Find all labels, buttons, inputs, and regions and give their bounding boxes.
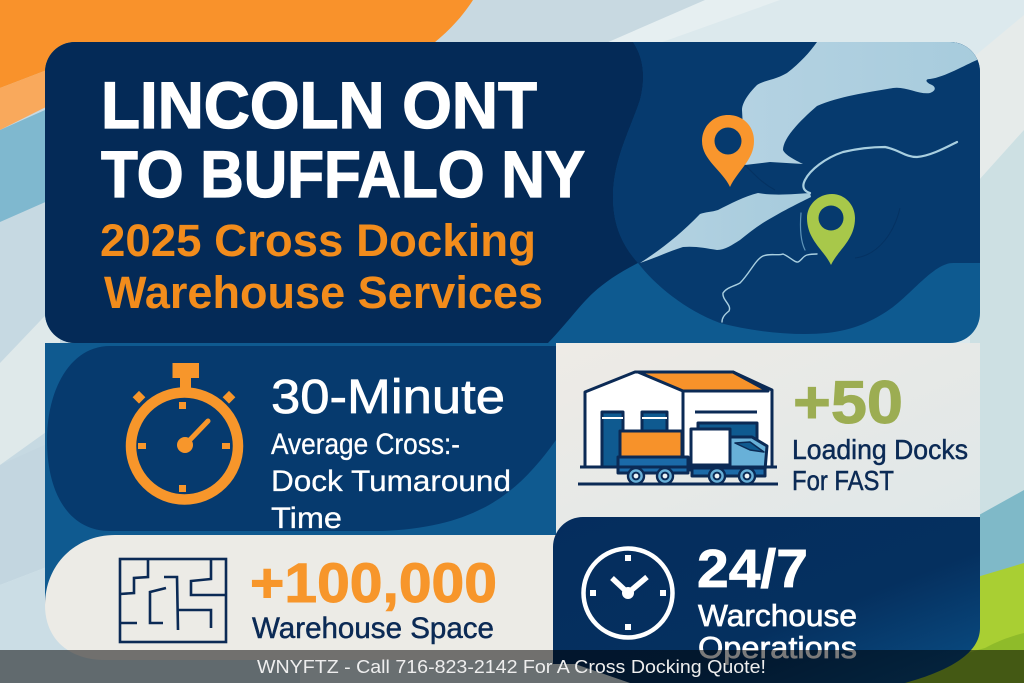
stat text: +100,000 — [250, 551, 497, 645]
stat text: +100,000: +100,000 — [250, 551, 497, 614]
icon: green map pin — [807, 194, 855, 265]
icon: warehouse and truck — [578, 372, 778, 484]
map lakes — [640, 40, 995, 263]
stat text: +50: Loading Docks — [792, 434, 968, 465]
map rivers — [722, 142, 957, 322]
title: LINCOLN ONT — [101, 68, 537, 142]
stat text: 30-minute: Time — [271, 502, 342, 535]
stat text: 24/7: Warchouse — [698, 598, 857, 633]
stat text: 30-minute: Dock Tumaround — [271, 465, 511, 498]
panel: title background — [45, 42, 643, 343]
subtitle: 2025 Cross Docking — [100, 215, 536, 266]
footer bar — [0, 650, 1024, 683]
icon: clock — [584, 548, 672, 638]
stat text: 24/7: Operations — [698, 630, 857, 665]
panel: loading docks — [556, 343, 980, 530]
title — [101, 68, 585, 211]
subtitle — [100, 215, 543, 318]
stat text: +50: +50 — [793, 369, 903, 436]
panel: warehouse space — [45, 535, 570, 660]
subtitle: Warehouse Services — [104, 267, 543, 318]
panel: 24/7 operations — [553, 517, 980, 683]
title: TO BUFFALO NY — [101, 137, 585, 211]
footer bar: WNYFTZ - Call 716-823-2142 For A Cross Docking Quote! — [257, 657, 766, 677]
stat text: +50: For FAST — [792, 465, 894, 496]
stat text: 24/7 — [697, 539, 857, 665]
stat text: 30-minute: Average Cross:- — [271, 428, 460, 461]
panel: header card with map — [45, 40, 995, 343]
stat text: 24/7: 24/7 — [697, 539, 808, 599]
stat text: 30-minute — [271, 371, 511, 535]
icon: orange map pin — [702, 115, 754, 187]
icon: floor plan maze — [120, 559, 226, 642]
icon: stopwatch — [131, 363, 238, 500]
stat text: +50 — [792, 369, 968, 496]
panel: turnaround time — [45, 343, 556, 605]
map — [613, 40, 995, 334]
stat text: +100,000: Warehouse Space — [252, 612, 494, 645]
stat text: 30-minute: 30-Minute — [271, 371, 505, 424]
